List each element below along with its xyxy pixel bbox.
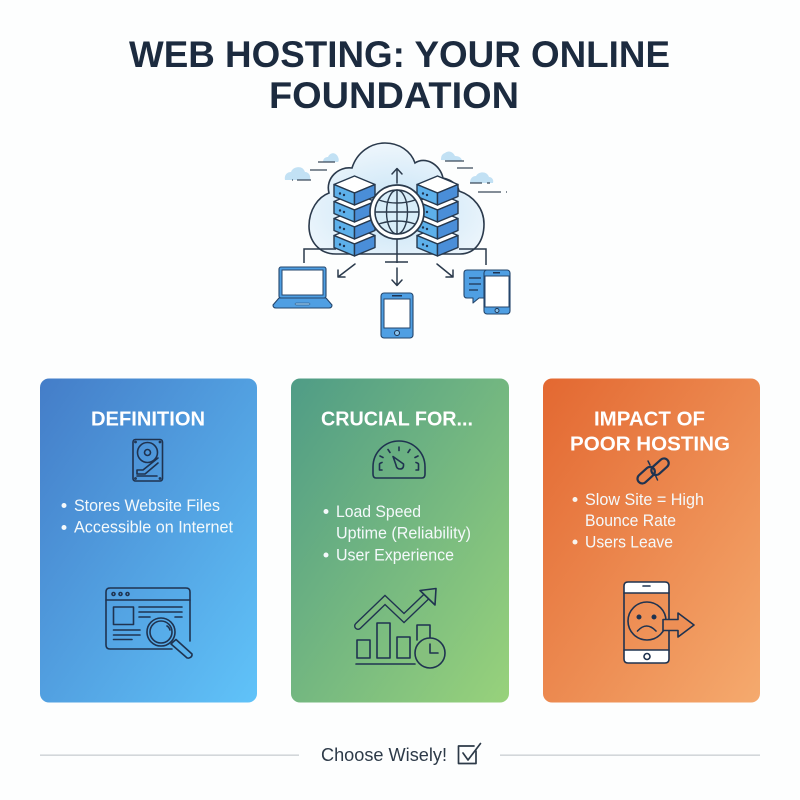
icon: browser window with magnifier — [106, 588, 192, 658]
footer divider right — [500, 754, 760, 756]
panel: definition — [40, 378, 257, 702]
heading: definition: DEFINITION — [91, 408, 205, 430]
left server stack — [334, 176, 375, 256]
bullet list: definition: Stores Website Files — [74, 497, 220, 515]
bullet list: impact: Bounce Rate — [585, 512, 676, 530]
right server stack — [417, 176, 458, 256]
connector lines — [304, 238, 486, 265]
bullet list: impact: Users Leave — [585, 534, 673, 552]
icon: hard drive — [133, 440, 162, 481]
chat bubble and phone — [464, 270, 510, 314]
hero illustration: cloud hosting network — [273, 143, 510, 338]
title: WEB HOSTING: YOUR ONLINE — [129, 34, 670, 75]
heading: impact of poor hosting: IMPACT OF — [594, 408, 705, 430]
bullet list: crucial for — [324, 503, 471, 564]
icon: speed gauge — [373, 441, 425, 478]
title — [129, 34, 670, 116]
footer call to action: Choose Wisely! — [321, 745, 447, 765]
heading: impact of poor hosting — [570, 408, 730, 456]
bullet list: impact — [572, 491, 704, 552]
bullet list: definition — [62, 497, 233, 536]
bullet list: impact: Slow Site = High — [585, 491, 704, 509]
bullet list: crucial for: User Experience — [336, 546, 454, 564]
bullet list: crucial for: Load Speed — [336, 503, 421, 521]
icon: checkbox — [458, 744, 480, 764]
icon: broken chain link — [636, 457, 671, 485]
bullet list: crucial for: Uptime (Reliability) — [336, 524, 471, 542]
small clouds — [285, 152, 493, 183]
laptop — [273, 267, 332, 308]
heading: impact of poor hosting: POOR HOSTING — [570, 434, 730, 456]
heading: crucial for: CRUCIAL FOR... — [321, 408, 473, 430]
globe — [370, 185, 424, 239]
panel: impact of poor hosting — [543, 378, 760, 702]
motion lines — [292, 161, 507, 192]
arrows — [338, 168, 453, 286]
bullet list: definition: Accessible on Internet — [74, 518, 233, 536]
tablet — [381, 293, 413, 338]
title: FOUNDATION — [269, 75, 519, 116]
icon: phone with sad face and exit arrow — [624, 582, 694, 663]
panel: crucial for — [291, 378, 509, 702]
icon: rising chart with clock — [356, 588, 445, 668]
footer divider left — [40, 754, 299, 756]
